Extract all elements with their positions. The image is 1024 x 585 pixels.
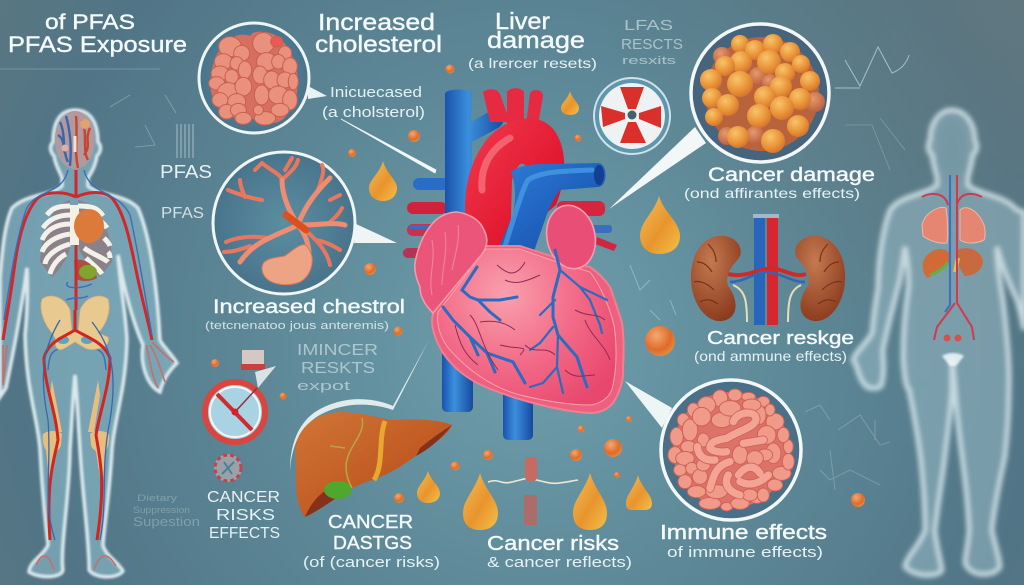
glow silhouette — [853, 110, 1024, 575]
green organ — [74, 260, 97, 281]
label: increased chestrol: (tetcnenatoo jous anteremis) — [205, 320, 389, 332]
label: cancer risks effects — [207, 489, 280, 542]
lungs — [922, 207, 985, 243]
label: faint suppression note — [133, 493, 200, 529]
pelvis — [41, 296, 109, 350]
label: cancer risks effects: CANCER — [207, 489, 280, 506]
droplets: bottom group — [417, 471, 652, 530]
gallbladder — [324, 481, 352, 499]
inner shading — [940, 120, 964, 180]
label: cancer risks: & cancer reflects) — [487, 554, 632, 571]
callout: branching circle to heart — [354, 224, 397, 243]
droplet: near branching circle — [369, 161, 397, 201]
title — [8, 11, 187, 57]
label: liver damage — [468, 8, 597, 71]
label: faint suppression note: Dietary — [137, 493, 178, 503]
small side labels — [160, 162, 212, 222]
small sketch near kidney — [630, 265, 676, 320]
kidney lobes — [694, 244, 842, 304]
panel: lumpy organ circle — [199, 23, 309, 133]
kidney right — [795, 236, 845, 321]
label: cancer risks effects: EFFECTS — [209, 525, 280, 542]
right side vessels — [557, 201, 617, 251]
panel: branching vessel circle — [213, 152, 355, 294]
label: cancer risks kidney: (ond ammune effects) — [694, 348, 847, 364]
label: small cholesterol note: Inicuecased — [330, 84, 422, 101]
cells — [700, 34, 825, 153]
label: small cholesterol note — [322, 84, 425, 121]
lower left vessel — [442, 330, 473, 412]
crotch highlight — [942, 353, 964, 366]
no-entry warning icon — [205, 382, 265, 442]
pelvic openings — [57, 336, 93, 344]
label: cancer damage: Cancer damage — [708, 165, 875, 186]
label: imincer risks: IMINCER — [297, 342, 378, 359]
faint divider under title — [0, 68, 160, 70]
label: cancer risks — [487, 533, 632, 571]
label: cancer risks effects: RISKS — [216, 507, 275, 524]
label: imincer risks — [297, 342, 378, 393]
droplet: large right — [640, 196, 680, 254]
label: faint suppression note: Suppression — [133, 505, 190, 515]
label: increased chestrol: Increased chestrol — [213, 297, 405, 318]
panel: immune brain circle — [661, 380, 801, 520]
small side labels: PFAS — [161, 205, 204, 222]
organ lump — [262, 245, 312, 285]
label: cancer dastgs: CANCER — [328, 512, 413, 532]
ventricles — [432, 246, 624, 413]
label: liver damage: (a lrercer resets) — [468, 55, 597, 71]
body silhouette — [0, 110, 177, 577]
title: PFAS Exposure — [8, 32, 187, 57]
label: imincer risks: RESKTS — [301, 360, 375, 377]
callout: heart to immune circle — [625, 381, 672, 428]
aorta — [465, 88, 564, 255]
kidney left — [691, 236, 741, 321]
faint barcode sketch — [177, 124, 193, 158]
faint sketch lines — [110, 95, 176, 147]
label: cancer risks kidney: Cancer reskge — [707, 328, 854, 348]
right body: translucent figure — [853, 110, 1024, 575]
label: increased chestrol — [205, 297, 405, 332]
faint network sketch — [805, 405, 890, 490]
label: cancer dastgs: (of (cancer risks) — [303, 554, 440, 571]
left body: anatomy figure — [0, 110, 177, 577]
callout: orange circle to heart — [609, 127, 706, 209]
label: cancer damage — [684, 165, 875, 201]
label: cancer dastgs — [303, 512, 440, 571]
right atrium — [415, 212, 487, 313]
label: faint suppression note: Supestion — [133, 514, 200, 529]
zigzag chart sketch — [835, 47, 909, 88]
label: imincer risks: expot — [297, 378, 351, 393]
vessels — [922, 175, 982, 340]
panel: orange fat cells circle — [691, 24, 829, 162]
branching tree — [224, 158, 345, 265]
knee bones — [43, 380, 109, 478]
lung organ — [74, 209, 104, 243]
renal vessels horizontal — [728, 268, 806, 275]
superior vena cava — [445, 90, 504, 280]
cells backing — [705, 37, 819, 151]
droplet: small top — [561, 91, 579, 115]
renal vessels vertical — [753, 214, 779, 325]
cell icon — [214, 454, 242, 482]
radiation warning icon — [594, 78, 670, 154]
label: increased cholesterol: cholesterol — [315, 31, 442, 57]
syringe icon — [241, 350, 276, 388]
label: faint LFAS results — [621, 17, 683, 67]
left stub vessels — [403, 178, 449, 258]
leg arteries — [44, 310, 110, 540]
organ base lobes — [210, 32, 298, 124]
brain base — [673, 392, 789, 508]
label: liver damage: Liver — [495, 8, 550, 34]
liver and spleen — [923, 248, 983, 278]
scattered orange particles — [211, 64, 865, 507]
ventricle inner — [438, 249, 616, 405]
label: faint LFAS results: RESCTS — [621, 36, 683, 53]
liver — [295, 412, 452, 517]
dark thin veins — [455, 262, 610, 376]
label: cancer damage: (ond affirantes effects) — [684, 185, 860, 201]
small side labels: PFAS — [160, 162, 212, 182]
blue veins upper body — [4, 170, 152, 370]
label: faint LFAS results: resxits — [622, 55, 677, 67]
pelvic organs — [944, 334, 962, 342]
faint sketch lines right — [845, 118, 905, 170]
label: liver damage: damage — [487, 27, 585, 53]
label: increased cholesterol — [315, 9, 442, 57]
organ cells — [209, 33, 298, 125]
label: faint LFAS results: LFAS — [624, 17, 673, 34]
label: immune effects — [660, 522, 827, 561]
ribcage — [40, 200, 112, 277]
left atrium — [541, 201, 601, 273]
bile duct — [330, 418, 363, 488]
vessel connector: bottom centre — [488, 457, 578, 525]
lower centre vessel — [503, 380, 533, 440]
heart illustration — [403, 88, 624, 440]
kidneys — [691, 214, 845, 325]
label: cancer dastgs: DASTGS — [333, 533, 412, 553]
atrium fibres — [431, 225, 458, 295]
label: cancer risks kidney — [694, 328, 854, 364]
coronary veins — [443, 250, 607, 393]
leg veins — [43, 320, 113, 540]
label: small cholesterol note: (a cholsterol) — [322, 104, 425, 121]
callout: brain to heart — [308, 86, 436, 173]
head detail — [55, 111, 95, 169]
callout: curved liver pointer — [290, 340, 429, 470]
label: cancer risks: Cancer risks — [487, 533, 619, 555]
orange ball: large — [645, 326, 675, 356]
pulmonary artery — [496, 163, 606, 254]
label: immune effects: Immune effects — [660, 522, 827, 544]
label: increased cholesterol: Increased — [318, 9, 435, 35]
brain blobs and folds — [668, 389, 794, 511]
liver ligament — [374, 421, 385, 480]
vessels upper body — [3, 170, 152, 340]
label: immune effects: of immune effects) — [667, 544, 823, 561]
liver underside — [305, 425, 452, 517]
title: of PFAS — [45, 11, 135, 34]
hands and feet detail — [3, 342, 174, 570]
